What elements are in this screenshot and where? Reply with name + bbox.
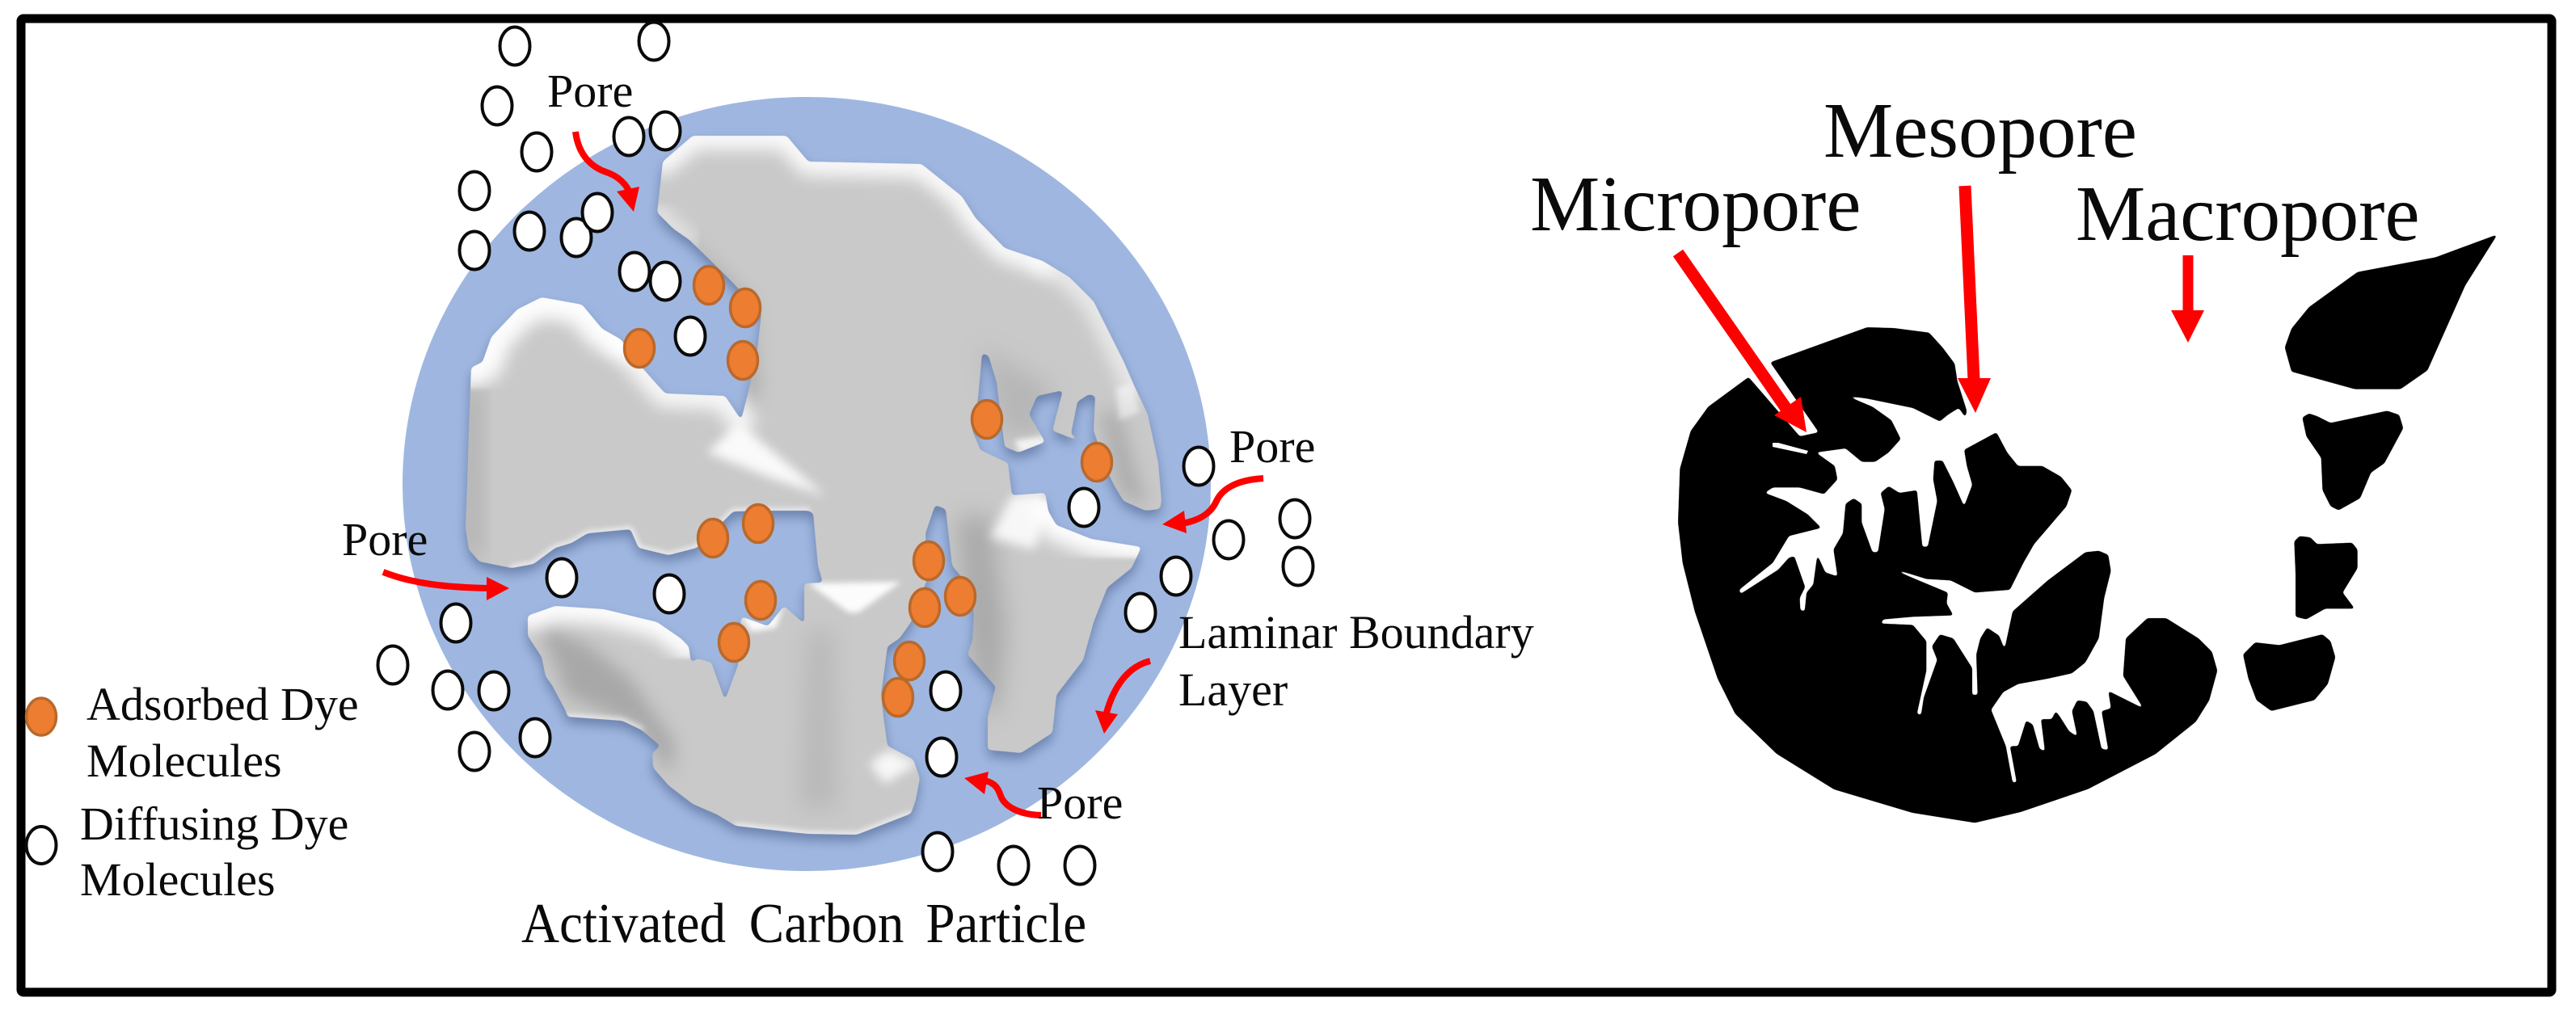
legend icon: adsorbed dye [26,698,57,735]
legend icon: diffusing dye [26,827,57,864]
label: mesopore: Mesopore [1823,87,2137,174]
arrow: macropore [2171,255,2204,343]
black carbon cross-section [1678,327,2217,823]
adsorbed dye molecules inside particle [624,267,1112,716]
label: micropore: Micropore [1530,161,1861,247]
arrow: top pore [575,132,639,212]
legend text: diffusing dye molecules: Molecules [80,853,276,906]
label: right pore: Pore [1229,420,1315,473]
label: laminar boundary layer: Layer [1178,663,1288,716]
arrow: laminar boundary layer [1095,661,1150,734]
white micropore slit [1773,443,1808,454]
arrow: left pore [383,572,509,600]
label: top pore: Pore [547,65,633,117]
detached carbon fragment 1 [2285,234,2498,389]
legend [26,678,359,906]
legend text: adsorbed dye molecules: Molecules [86,734,282,787]
legend text: adsorbed dye molecules: Adsorbed Dye [86,678,359,730]
caption: activated carbon particle: Particle [925,892,1086,955]
caption: activated carbon particle: Activated [521,892,726,955]
detached carbon fragment 2 [2302,410,2403,511]
arrow: right pore [1162,478,1263,533]
detached carbon fragment 4 [2243,634,2335,711]
legend text: diffusing dye molecules: Diffusing Dye [80,797,348,850]
detached carbon fragment 3 [2294,536,2358,620]
arrow: bottom pore [964,772,1041,815]
label: bottom pore: Pore [1037,776,1123,829]
label: macropore: Macropore [2076,170,2420,257]
diffusing dye molecules [378,23,1313,884]
label: laminar boundary layer: Laminar Boundary [1178,606,1534,659]
arrow: micropore [1678,253,1807,432]
arrow: mesopore [1958,186,1991,413]
label: left pore: Pore [342,513,428,566]
grey carbon pore structure [461,136,1162,835]
panel: activated carbon particle diagram [342,23,1534,955]
blue particle disc [403,97,1211,871]
panel: pore size diagram [1530,87,2498,823]
caption: activated carbon particle: Carbon [749,892,904,955]
